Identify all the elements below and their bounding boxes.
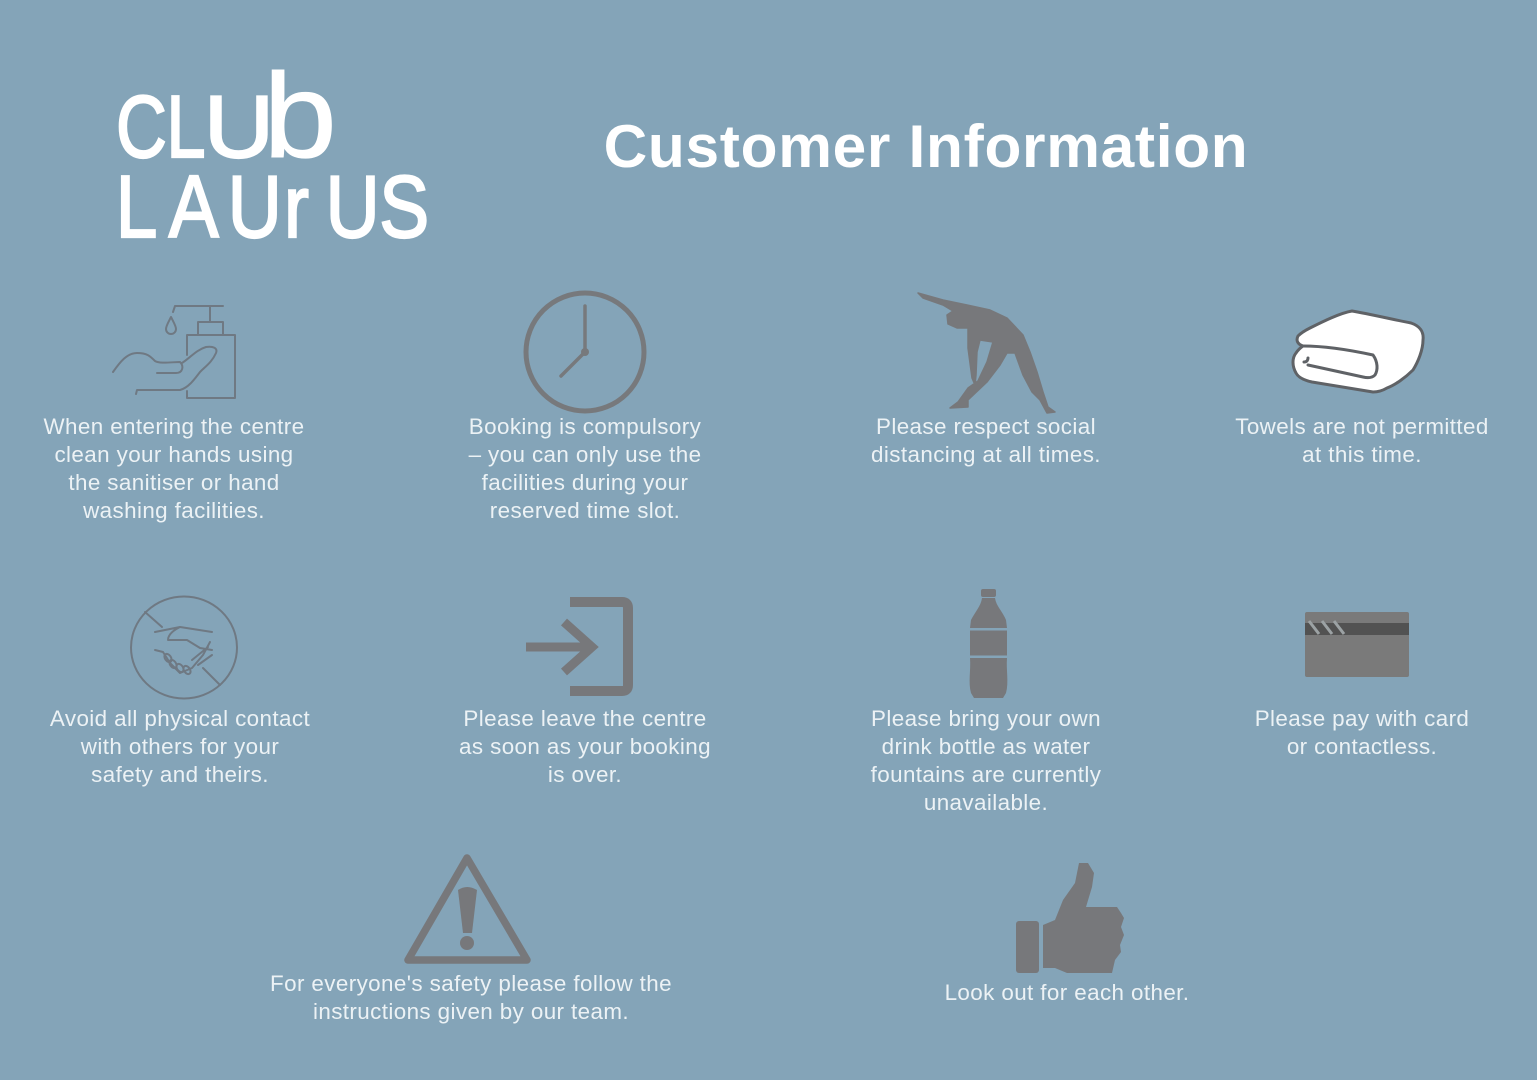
text: social distancing: Please respect social xyxy=(876,414,1096,439)
icon: hand sanitiser xyxy=(113,306,235,398)
text: clean hands: washing facilities. xyxy=(82,498,265,523)
logo: Club Laurus: b xyxy=(263,49,337,183)
panel: social distancing xyxy=(871,293,1101,467)
panel: physical contact xyxy=(50,596,310,787)
logo: Club Laurus: U xyxy=(204,77,274,176)
text: social distancing: distancing at all times. xyxy=(871,442,1101,467)
title: Customer Information xyxy=(604,112,1248,180)
text: look out: Look out for each other. xyxy=(945,980,1189,1005)
text: towels: Towels are not permitted xyxy=(1235,414,1489,439)
icon: folded towel xyxy=(1293,311,1423,392)
text: follow instructions: For everyone's safety please follow the xyxy=(270,971,672,996)
icon: water bottle xyxy=(970,589,1007,698)
logo: Club Laurus: LAUrUS xyxy=(116,158,429,256)
text: booking: – you can only use the xyxy=(469,442,701,467)
panel: look out xyxy=(945,863,1189,1005)
text: leave the centre: is over. xyxy=(548,762,622,787)
icon: clock xyxy=(526,293,644,411)
logo: Club Laurus xyxy=(116,49,429,256)
text: leave the centre: Please leave the centre xyxy=(463,706,707,731)
text: clean hands: the sanitiser or hand xyxy=(68,470,280,495)
text: booking: facilities during your xyxy=(482,470,688,495)
text: physical contact: Avoid all physical contact xyxy=(50,706,310,731)
text: clean hands: When entering the centre xyxy=(43,414,305,439)
text: card payment: Please pay with card xyxy=(1255,706,1469,731)
icon: warning triangle xyxy=(408,858,527,960)
icon: payment card xyxy=(1305,612,1409,677)
panel: card payment xyxy=(1255,612,1469,759)
icon: thumbs up xyxy=(1016,863,1124,973)
icon: enter arrow xyxy=(526,602,628,691)
logo: Club Laurus: CL xyxy=(116,77,206,176)
panel: booking xyxy=(469,293,702,523)
text: booking: reserved time slot. xyxy=(490,498,680,523)
panel: drink bottle xyxy=(871,589,1102,815)
text: clean hands: clean your hands using xyxy=(54,442,294,467)
text: drink bottle: drink bottle as water xyxy=(882,734,1091,759)
panel: leave the centre xyxy=(459,602,711,787)
text: booking: Booking is compulsory xyxy=(469,414,702,439)
text: leave the centre: as soon as your booking xyxy=(459,734,711,759)
text: card payment: or contactless. xyxy=(1287,734,1437,759)
text: towels: at this time. xyxy=(1302,442,1422,467)
text: drink bottle: unavailable. xyxy=(924,790,1048,815)
panel: clean hands xyxy=(43,306,305,523)
icon: stretching figure xyxy=(918,293,1055,413)
text: drink bottle: Please bring your own xyxy=(871,706,1101,731)
panel: towels xyxy=(1235,311,1489,467)
text: physical contact: with others for your xyxy=(80,734,279,759)
text: drink bottle: fountains are currently xyxy=(871,762,1102,787)
panel: follow instructions xyxy=(270,858,672,1024)
text: physical contact: safety and theirs. xyxy=(91,762,269,787)
text: follow instructions: instructions given by our team. xyxy=(313,999,629,1024)
icon: no handshake xyxy=(131,596,237,698)
